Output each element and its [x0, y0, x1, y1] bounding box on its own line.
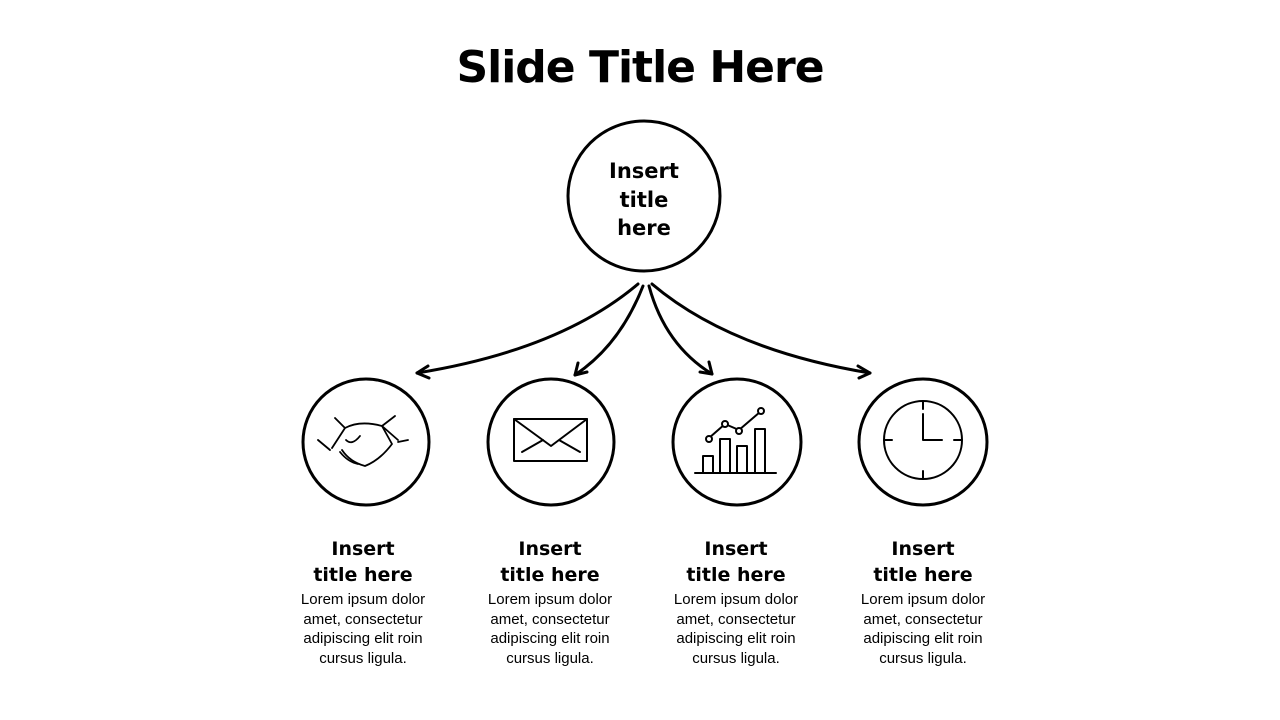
center title: title: [620, 188, 668, 212]
column 3: title here: [686, 564, 786, 586]
circle: envelope: [488, 379, 614, 505]
column 3: Lorem ipsum dolor amet, consectetur adipiscing elit roin cursus ligula.: [674, 591, 798, 666]
column 1: title here: [313, 564, 413, 586]
column 4: Lorem ipsum dolor amet, consectetur adipiscing elit roin cursus ligula.: [861, 591, 985, 666]
column 3: Insert: [704, 538, 768, 560]
arrow 3: [649, 286, 712, 374]
column 3: [674, 538, 798, 666]
arrow 1: [417, 284, 638, 378]
center title: [609, 159, 679, 240]
column 2: [488, 538, 612, 666]
arrow 4: [652, 284, 870, 378]
column 1: Insert: [331, 538, 395, 560]
column 2: Lorem ipsum dolor amet, consectetur adipiscing elit roin cursus ligula.: [488, 591, 612, 666]
arrow 2: [575, 286, 643, 375]
column 4: [861, 538, 985, 666]
column 4: Insert: [891, 538, 955, 560]
circle: chart: [673, 379, 801, 505]
title: Slide Title Here: [456, 42, 824, 93]
center title: here: [617, 216, 671, 240]
column 1: Lorem ipsum dolor amet, consectetur adipiscing elit roin cursus ligula.: [301, 591, 425, 666]
center title: Insert: [609, 159, 679, 183]
column 2: title here: [500, 564, 600, 586]
column 2: Insert: [518, 538, 582, 560]
center circle: [568, 121, 720, 271]
column 1: [301, 538, 425, 666]
circle: handshake: [303, 379, 429, 505]
column 4: title here: [873, 564, 973, 586]
circle: clock: [859, 379, 987, 505]
